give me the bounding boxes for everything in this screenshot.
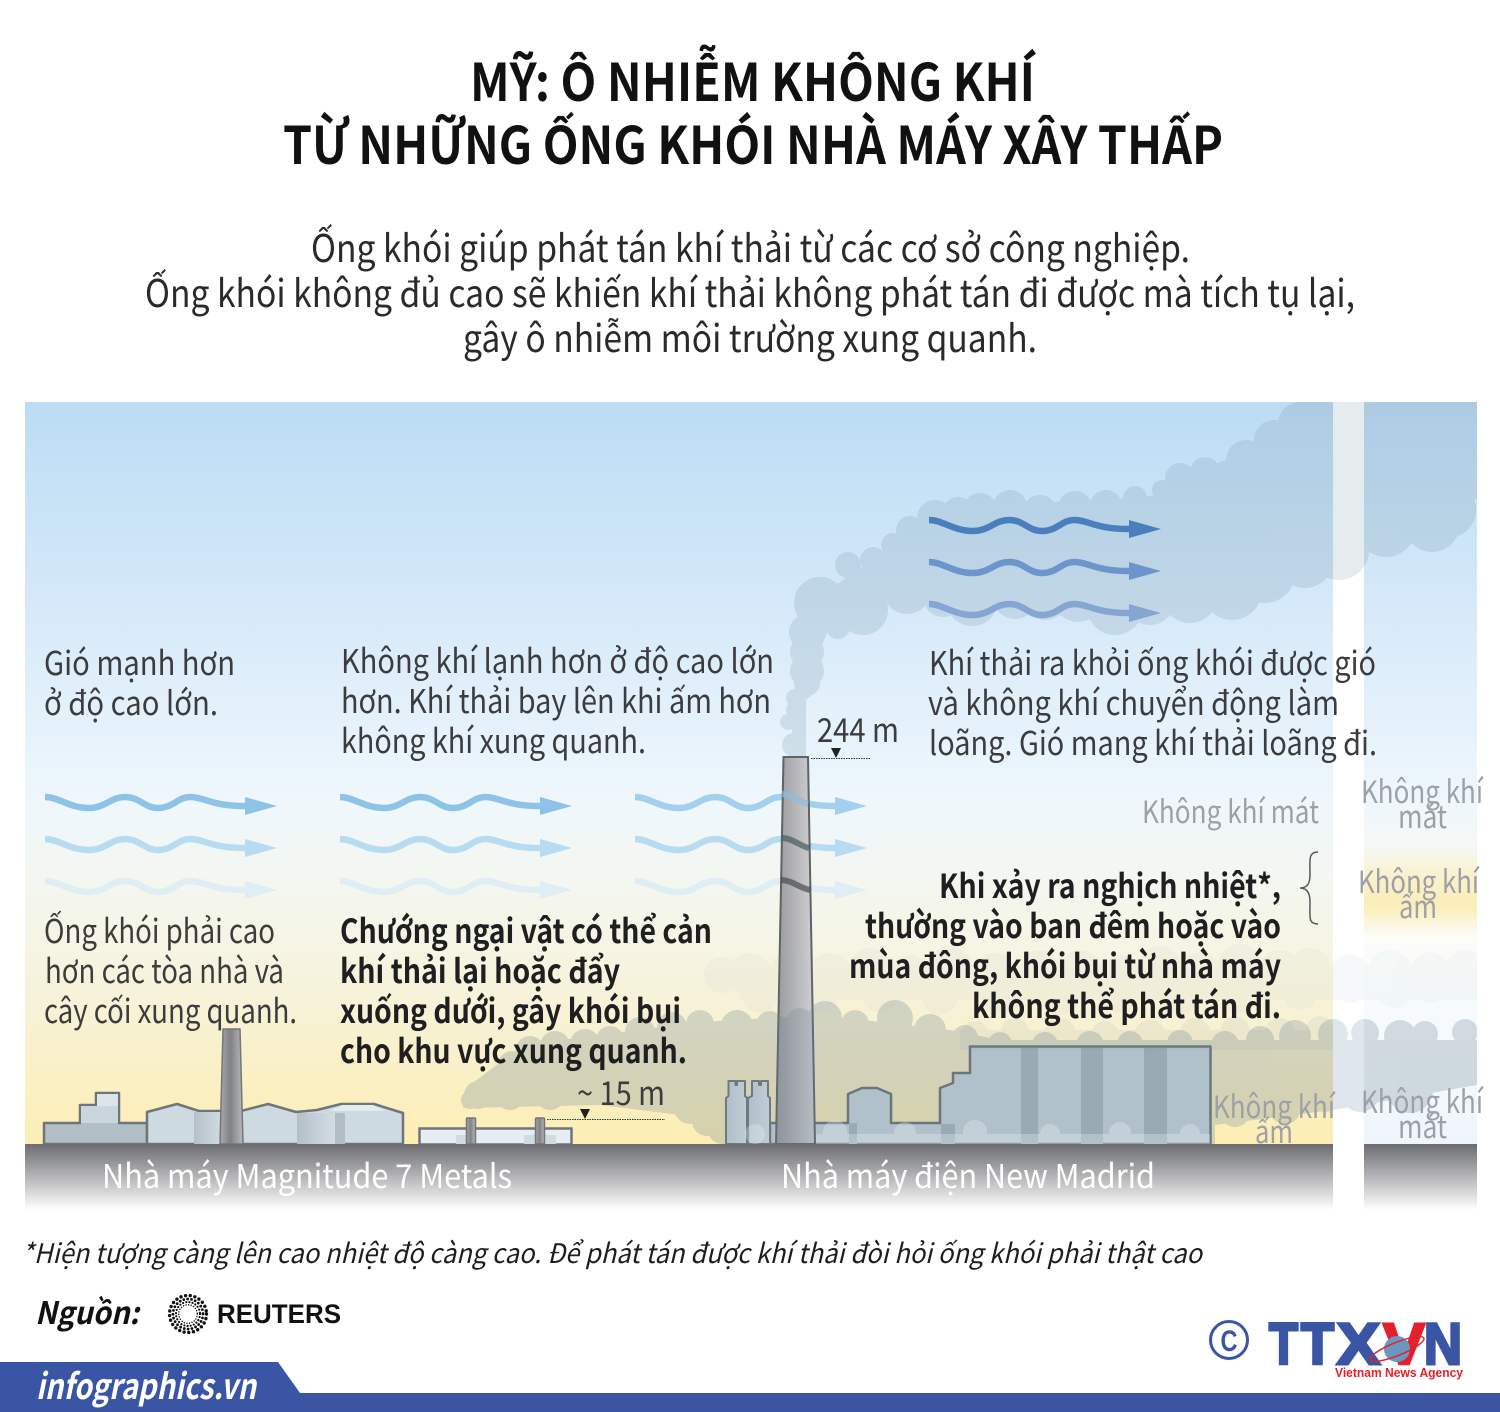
text: colder air	[341, 635, 774, 763]
title: MỸ: Ô NHIỄM KHÔNG KHÍ	[470, 41, 1037, 116]
text: inversion	[849, 860, 1281, 1028]
text: chimney must be taller: cây cối xung quanh.	[44, 985, 297, 1033]
labels: bottom air layers: ấm	[1255, 1107, 1293, 1152]
wind arrows: middle column	[340, 797, 572, 899]
wind arrows: high altitude	[929, 520, 1161, 622]
smoke plume from tall chimney	[780, 402, 1495, 757]
text: colder air: hơn. Khí thải bay lên khi ấm hơn	[341, 675, 771, 723]
text: stronger wind: Gió mạnh hơn	[44, 637, 235, 685]
text: obstacles: xuống dưới, gây khói bụi	[340, 985, 681, 1033]
logo: TTXVN: T	[1269, 1312, 1298, 1377]
logo: TTXVN: X	[1337, 1312, 1380, 1377]
source: REUTERS	[217, 1299, 341, 1329]
logo: TTXVN: T	[1301, 1312, 1334, 1377]
text: wind dilutes emissions: loãng. Gió mang khí thải loãng đi.	[929, 717, 1377, 765]
icon: Reuters logo	[170, 1296, 206, 1332]
source: Nguồn:	[35, 1288, 141, 1333]
label: 15 m height: ~ 15 m	[577, 1067, 665, 1115]
panel: sky background	[25, 402, 1477, 1144]
labels: bottom air layers	[1213, 1077, 1484, 1152]
label: 244 m height: 244 m	[817, 704, 899, 752]
text: obstacles	[340, 905, 712, 1073]
logo: TTXVN	[1269, 1312, 1464, 1380]
trapped smoke layer lower	[461, 1000, 1478, 1144]
text: colder air: Không khí lạnh hơn ở độ cao lớn	[341, 635, 774, 683]
text: obstacles: khí thải lại hoặc đẩy	[340, 945, 620, 993]
title	[283, 41, 1223, 179]
brace	[1300, 852, 1318, 924]
factory names: Nhà máy điện New Madrid	[781, 1150, 1155, 1198]
building: New Madrid power plant	[726, 1046, 1210, 1144]
text: wind dilutes emissions	[928, 637, 1377, 765]
labels: right column air layers top: Không khí	[1358, 857, 1480, 902]
label: cool air: Không khí mát	[1142, 787, 1319, 832]
building: Magnitude 7 Metals factory	[44, 1029, 403, 1144]
text: chimney must be taller: Ống khói phải cao	[44, 905, 275, 953]
icon: copyright	[1210, 1322, 1248, 1358]
trapped smoke layer upper	[1333, 954, 1364, 1003]
text: colder air: không khí xung quanh.	[341, 715, 646, 763]
ground strip	[25, 1144, 1477, 1210]
text: wind dilutes emissions: và không khí chuyển động làm	[928, 677, 1339, 725]
text: obstacles: Chướng ngại vật có thể cản	[340, 905, 712, 953]
logo: TTXVN: N	[1424, 1312, 1462, 1377]
label: 15 m height	[547, 1067, 665, 1120]
labels: right column air layers top: mát	[1398, 792, 1447, 837]
text: inversion: mùa đông, khói bụi từ nhà máy	[849, 940, 1281, 988]
building: low stacks factory	[420, 1118, 572, 1144]
labels: right column air layers top: ấm	[1399, 882, 1437, 927]
labels: bottom air layers: mát	[1398, 1102, 1447, 1147]
text: stronger wind: ở độ cao lớn.	[44, 677, 218, 725]
wind arrows: left column	[45, 797, 277, 899]
footer site name: infographics.vn	[36, 1359, 258, 1410]
labels: bottom air layers: Không khí	[1213, 1082, 1336, 1127]
text: inversion: Khi xảy ra nghịch nhiệt*,	[939, 860, 1281, 908]
footnote: *Hiện tượng càng lên cao nhiệt độ càng cao. Để phát tán được khí thải đòi hỏi ống khói phải thật cao	[22, 1232, 1204, 1271]
wind arrows: right column	[635, 797, 867, 899]
intro text: gây ô nhiễm môi trường xung quanh.	[463, 308, 1037, 363]
trapped smoke layer pale	[960, 1016, 1334, 1052]
tall chimney	[776, 757, 815, 1144]
logo: TTXVN: Vietnam News Agency	[1335, 1365, 1464, 1380]
source	[35, 1288, 341, 1333]
text: obstacles: cho khu vực xung quanh.	[340, 1025, 687, 1073]
labels: right column air layers top	[1358, 767, 1484, 927]
logo: TTXVN: V	[1383, 1312, 1425, 1377]
text: chimney must be taller	[44, 905, 297, 1033]
factory names	[102, 1150, 1155, 1198]
text: inversion: không thể phát tán đi.	[972, 980, 1281, 1028]
smoke at building base	[745, 1120, 1210, 1144]
intro text: Ống khói không đủ cao sẽ khiến khí thải không phát tán đi được mà tích tụ lại,	[145, 263, 1355, 318]
intro text: Ống khói giúp phát tán khí thải từ các cơ sở công nghiệp.	[311, 218, 1190, 273]
factory names: Nhà máy Magnitude 7 Metals	[102, 1150, 512, 1198]
footer bar	[0, 1362, 1500, 1412]
text: stronger wind	[44, 637, 235, 725]
intro text	[145, 218, 1355, 363]
title: TỪ NHỮNG ỐNG KHÓI NHÀ MÁY XÂY THẤP	[283, 104, 1223, 179]
text: inversion: thường vào ban đêm hoặc vào	[865, 900, 1281, 948]
icon: copyright: C	[1220, 1325, 1238, 1358]
text: wind dilutes emissions: Khí thải ra khỏi ống khói được gió	[929, 637, 1376, 685]
text: chimney must be taller: hơn các tòa nhà và	[45, 945, 284, 993]
